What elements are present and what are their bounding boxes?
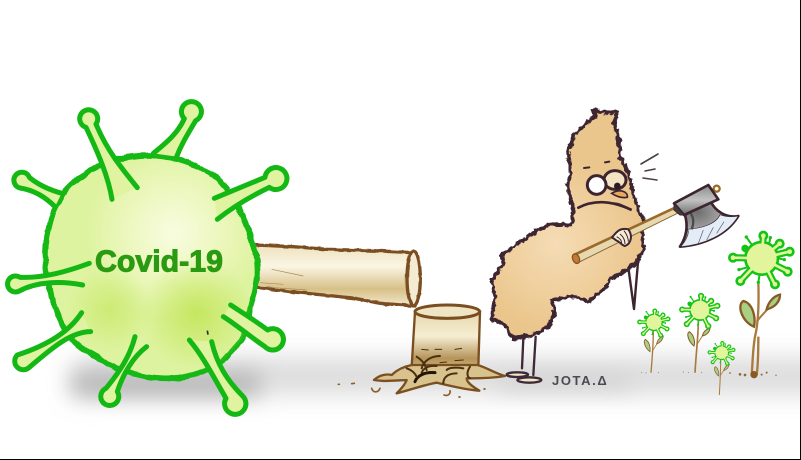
virus spikes — [8, 102, 287, 414]
felled tree log — [255, 245, 420, 306]
face — [578, 162, 632, 210]
large sprout — [728, 231, 795, 378]
legs and feet — [507, 337, 541, 383]
virus label: Covid-19 — [95, 246, 223, 279]
hand — [612, 229, 631, 246]
motion lines — [641, 154, 658, 180]
virus body — [45, 155, 258, 378]
medium sprout — [679, 293, 720, 373]
signature: JOTA.Δ — [552, 373, 608, 388]
small front sprout — [708, 341, 736, 395]
main virus — [8, 102, 287, 414]
back point — [628, 262, 638, 309]
roots — [374, 365, 505, 393]
soil specks — [641, 371, 777, 376]
tree stump with roots — [338, 305, 505, 397]
wood chips — [338, 383, 485, 397]
axe — [571, 185, 738, 265]
ground shadow — [72, 360, 801, 396]
small left sprout — [637, 308, 670, 373]
axe blade — [674, 185, 738, 247]
body — [492, 109, 644, 338]
character: map-shaped figure with axe — [492, 109, 738, 383]
axe handle — [571, 205, 683, 265]
sprouts — [637, 231, 795, 395]
